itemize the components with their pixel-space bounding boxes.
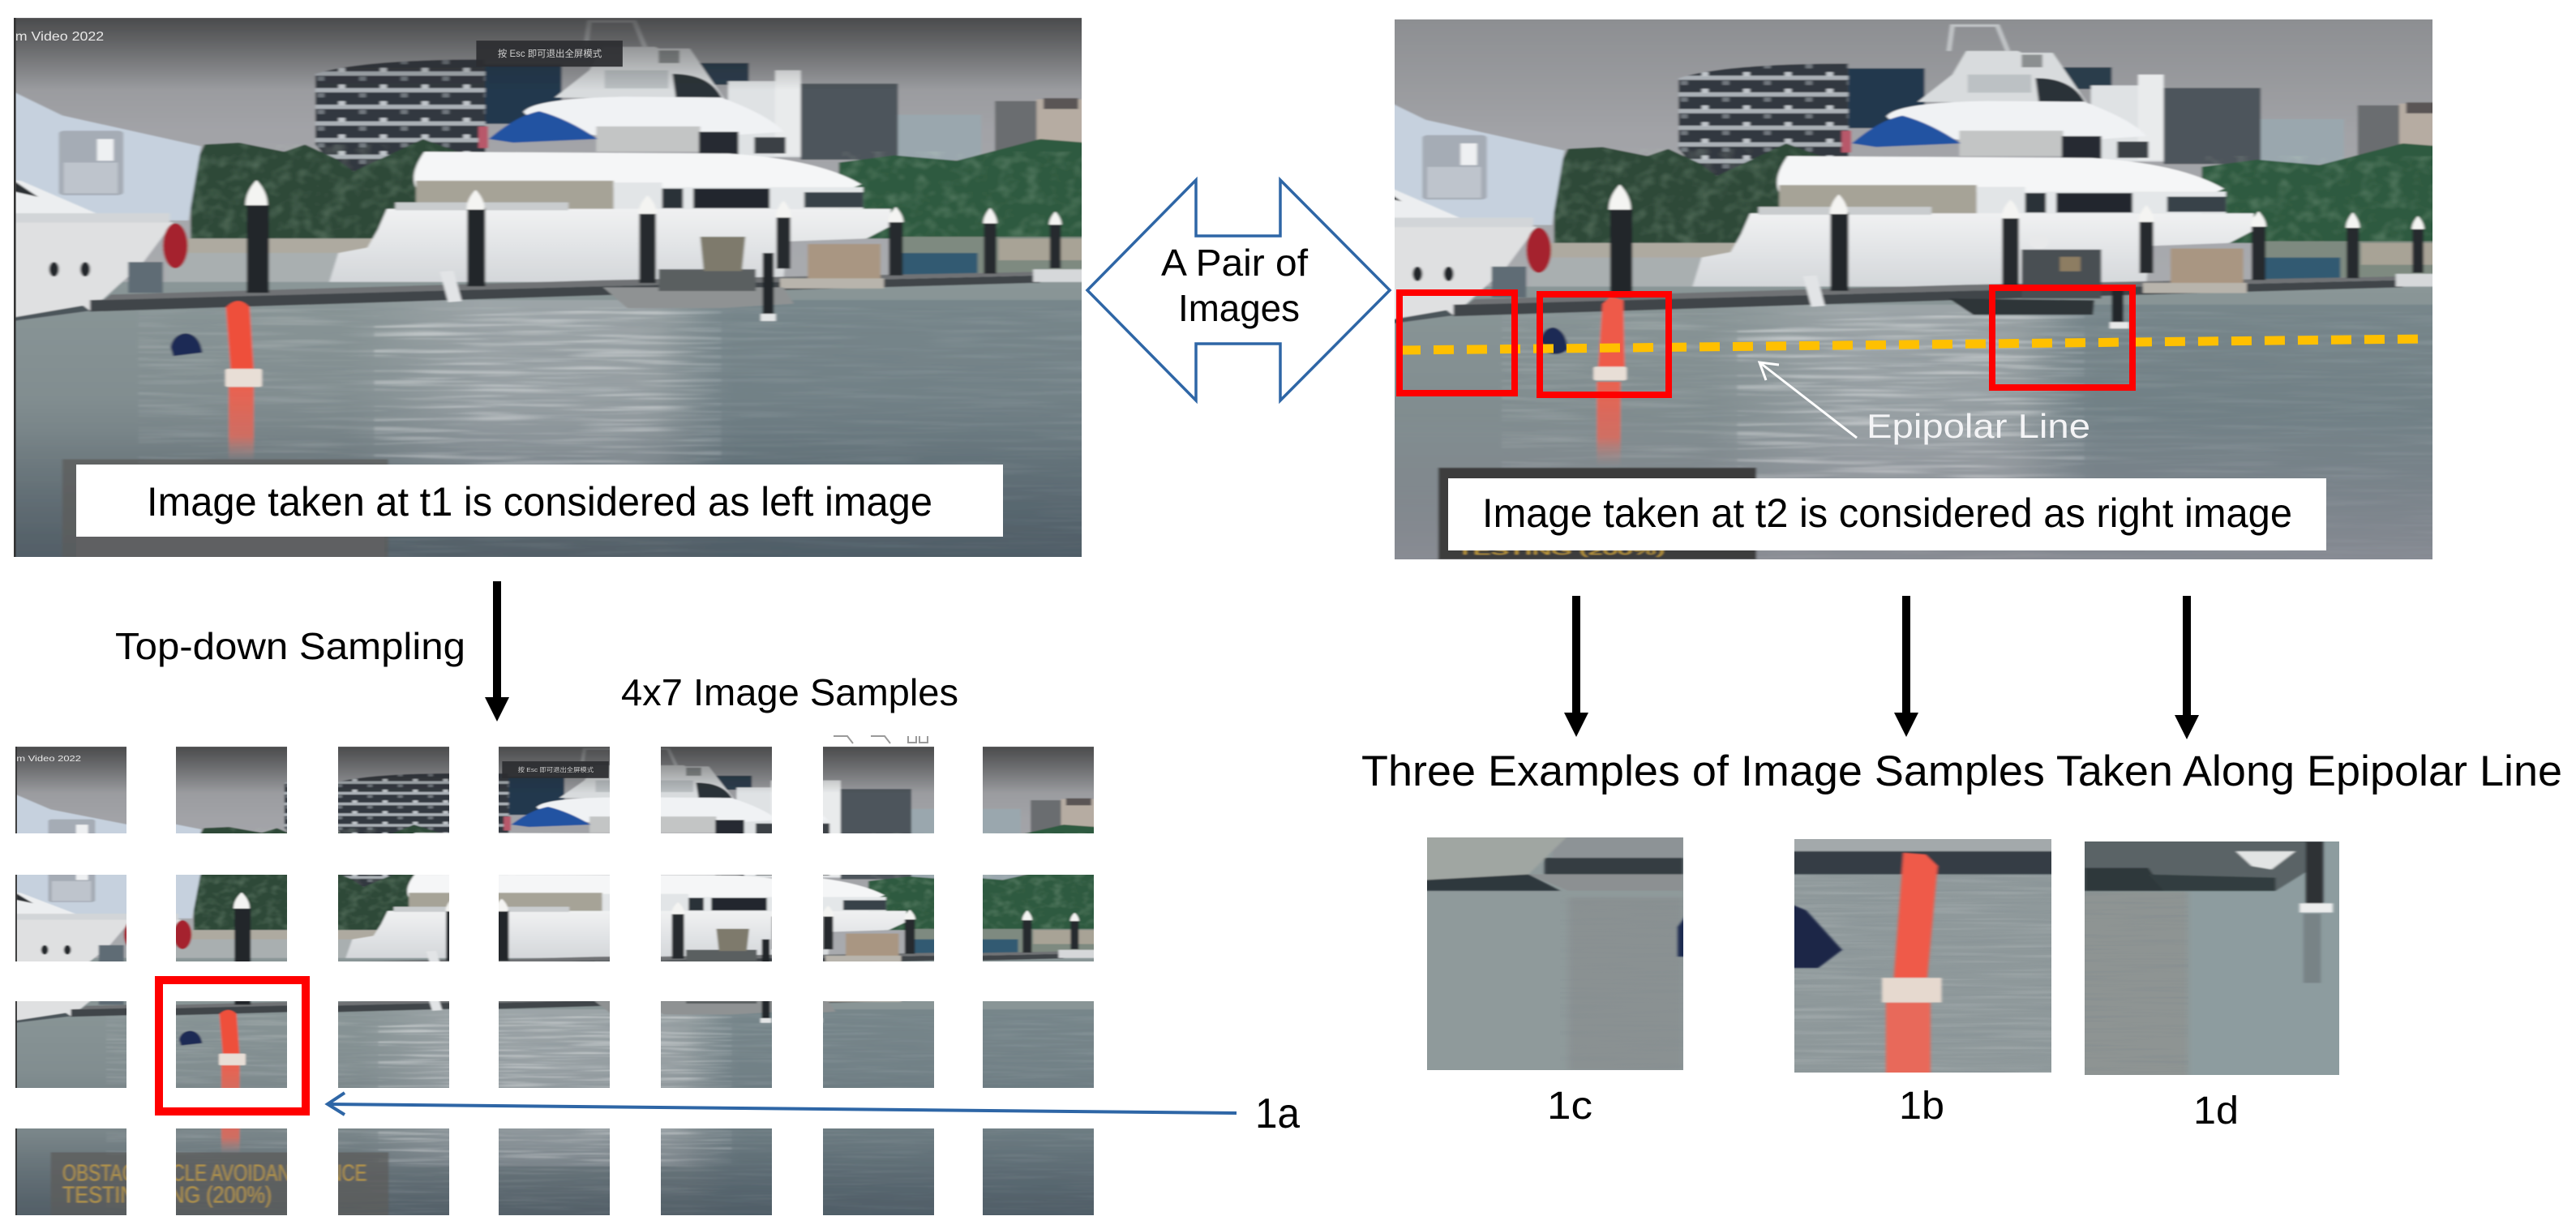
- red box: sample 1c location: [1399, 293, 1515, 393]
- label: 1b: 1b: [1899, 1085, 1944, 1128]
- caption: left image: Image taken at t1 is considered as left image: [147, 479, 932, 525]
- double arrow: a pair of images: Images: [1178, 287, 1300, 329]
- label: 1a: 1a: [1255, 1090, 1300, 1137]
- caption: right image: Image taken at t2 is considered as right image: [1482, 490, 2292, 536]
- double arrow: a pair of images: A Pair of: [1161, 242, 1308, 284]
- grid row 4: [0, 857, 1155, 1229]
- boat t2: [1949, 298, 2094, 315]
- epipolar line: dashed yellow: [1400, 339, 2424, 350]
- right image: taken at t2: TESTING (200%): [1457, 544, 1665, 557]
- caption: left image: [76, 465, 1003, 537]
- watermark box t2: [1438, 468, 1756, 559]
- buoy t2: [1597, 382, 1621, 467]
- left image: taken at t1: [0, 0, 1165, 579]
- caption: right image: [1448, 478, 2326, 550]
- label: 1d: 1d: [2193, 1090, 2239, 1133]
- double arrow: a pair of images: [1087, 180, 1390, 400]
- label: 1c: 1c: [1547, 1085, 1592, 1128]
- red box: sample 1d location: [1992, 288, 2132, 388]
- arrow: down to sample 1b: [1894, 596, 1918, 737]
- label: top-down sampling: Top-down Sampling: [115, 625, 465, 667]
- right image: taken at t2: [1263, 4, 2527, 584]
- arrow: epipolar line pointer: [1759, 362, 1857, 438]
- sample image 1c: [1427, 837, 1683, 1070]
- label: epipolar line: Epipolar Line: [1867, 407, 2090, 445]
- heading: three examples of image samples: Three Examples of Image Samples Taken Along Epipolar Line: [1361, 747, 2562, 795]
- arrow: top-down sampling: [485, 581, 509, 722]
- image sample grid 4x7: [0, 735, 1155, 1229]
- red box: sample 1a: [159, 980, 306, 1111]
- arrow: down to sample 1d: [2175, 596, 2199, 739]
- sample image 1d: [2085, 841, 2339, 1075]
- label: 4x7 image samples: 4x7 Image Samples: [621, 671, 958, 713]
- sample image 1b: [1794, 839, 2051, 1073]
- red box: sample 1b location: [1540, 294, 1669, 395]
- arrow: down to sample 1c: [1564, 596, 1588, 737]
- arrow: 1a pointer: [328, 1093, 1237, 1115]
- grid row 3: [0, 816, 1155, 1188]
- grid row 1: [0, 735, 1155, 1107]
- grid row 2: [0, 777, 1155, 1149]
